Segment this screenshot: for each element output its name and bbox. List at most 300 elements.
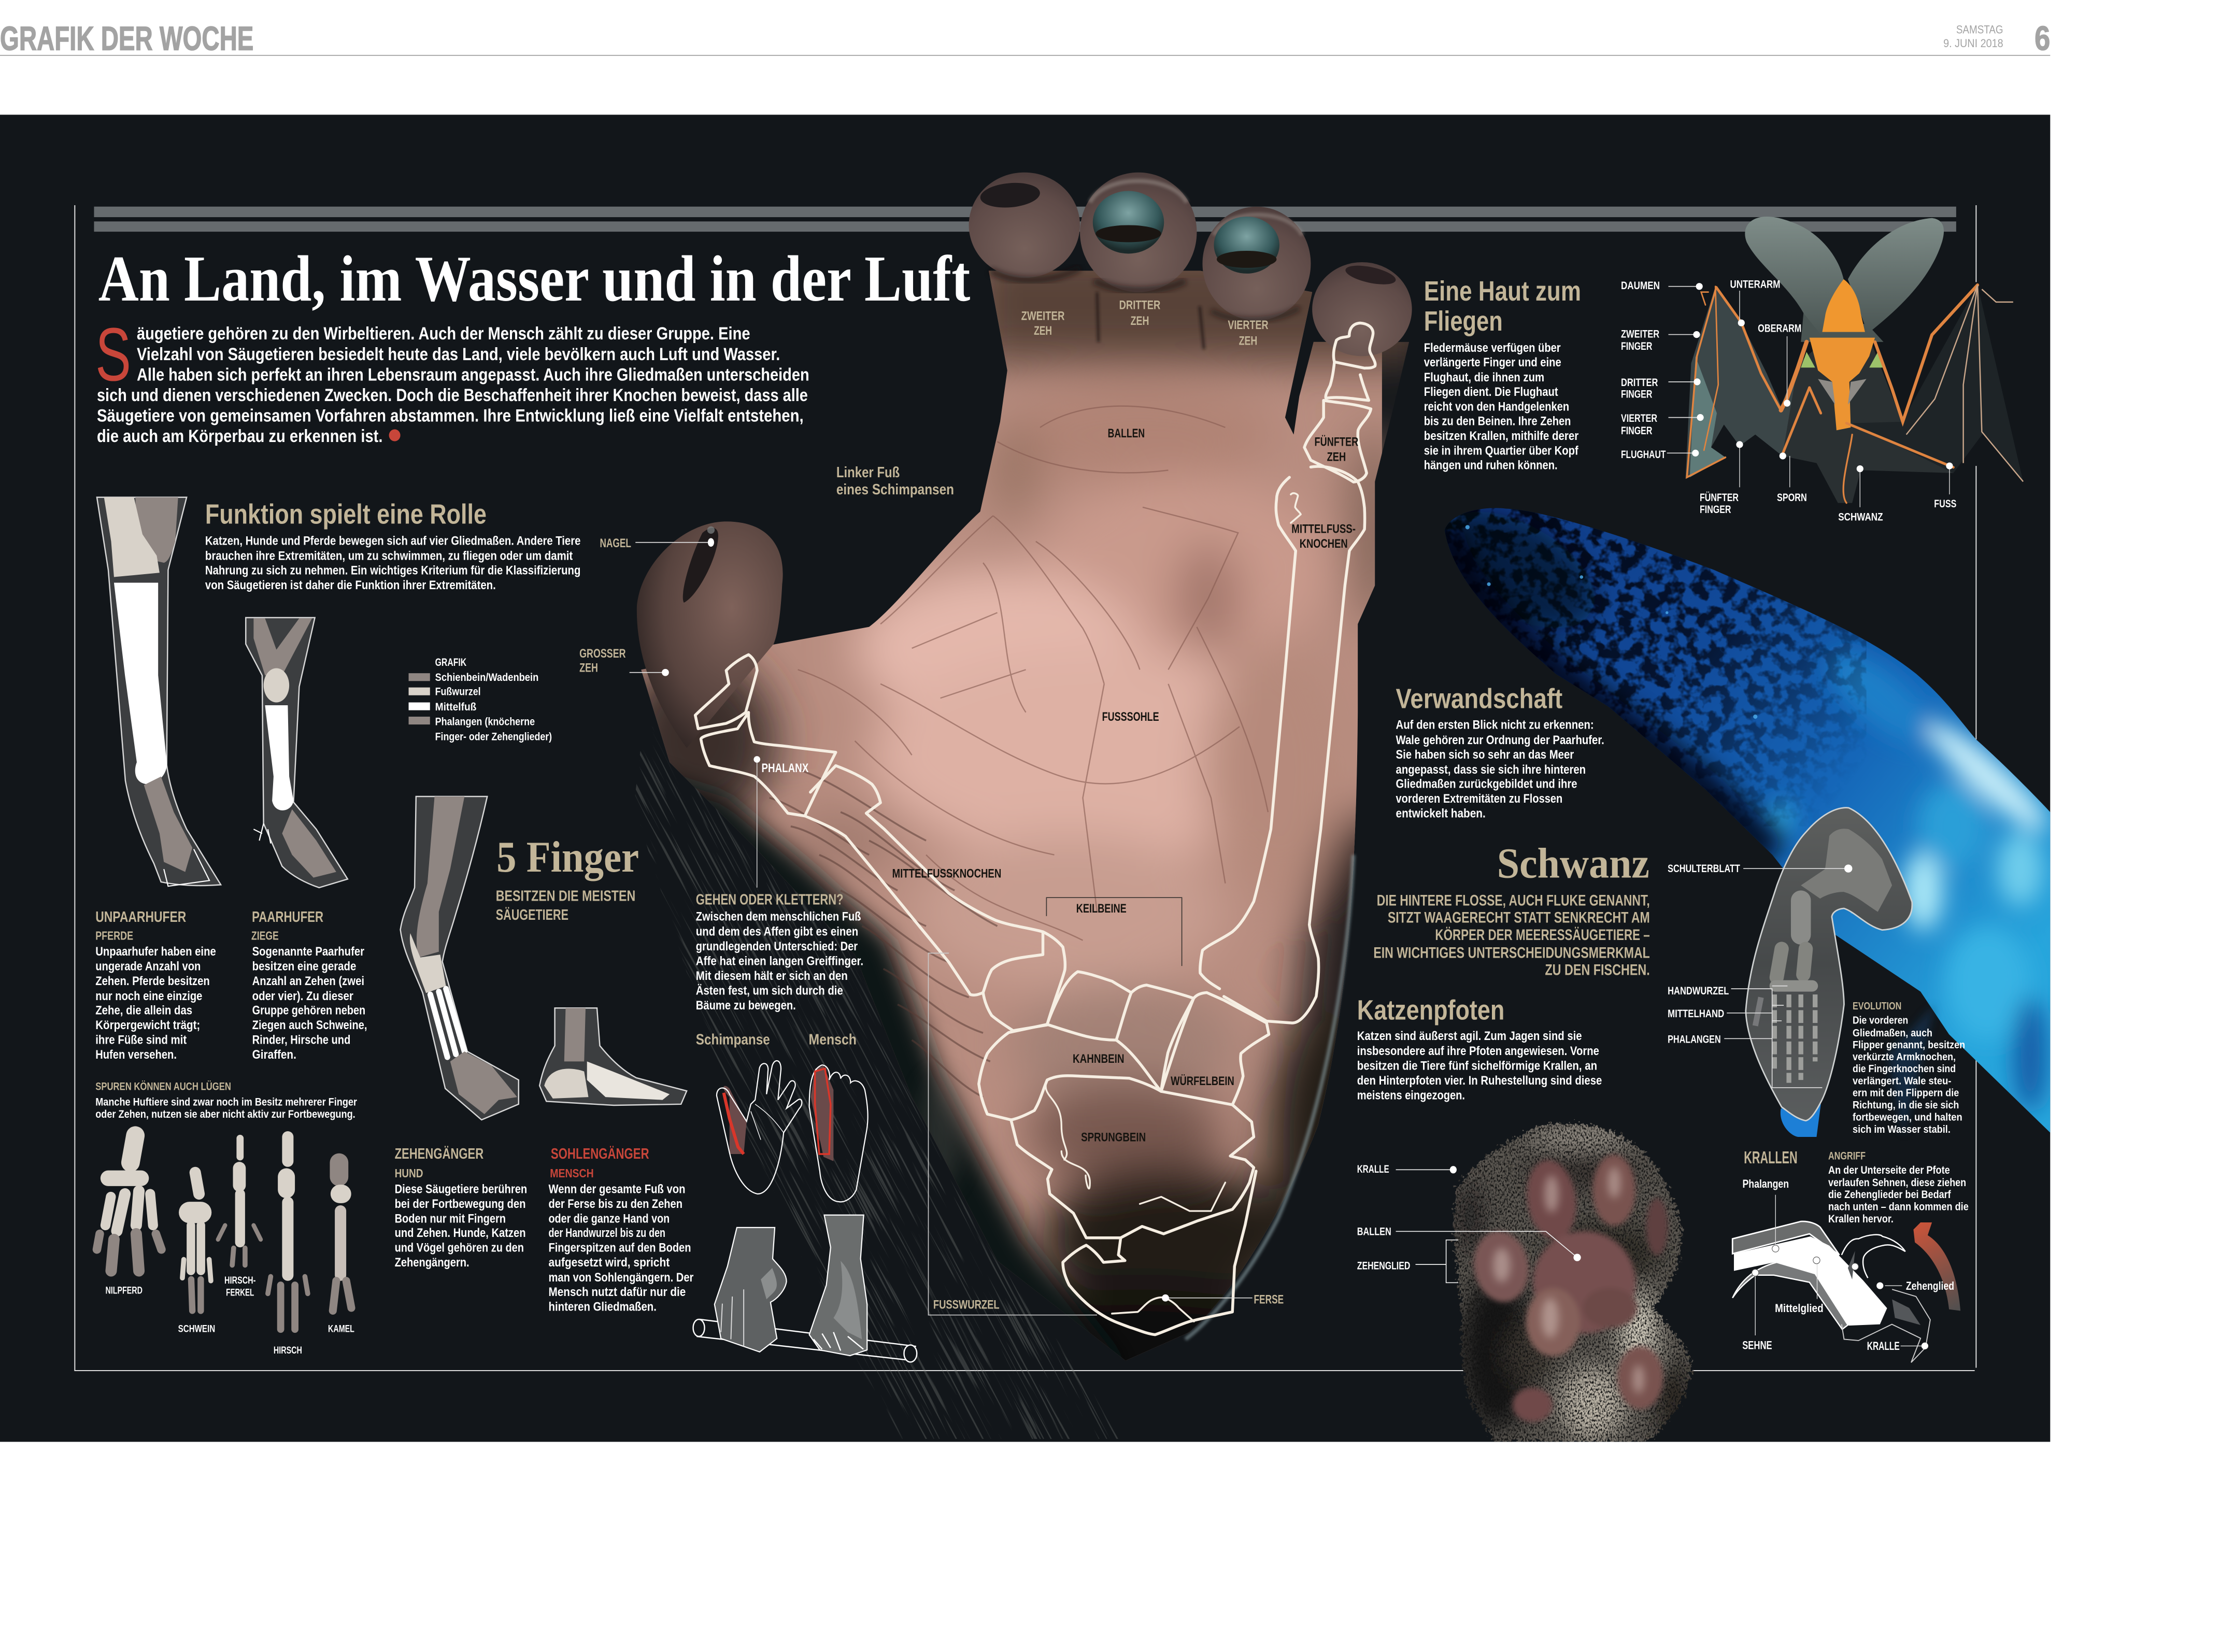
text: Paarhufer: Giraffen. <box>252 1048 296 1062</box>
label: Vierter Finger: FINGER <box>1621 425 1652 437</box>
paw labels <box>1357 1163 1581 1283</box>
body text <box>205 534 580 592</box>
label: Oberarm: OBERARM <box>1758 323 1801 335</box>
label: Sporn: SPORN <box>1777 492 1807 504</box>
text: Sohlengaenger: der Ferse bis zu den Zehen <box>549 1197 682 1211</box>
text: Krallen <box>1744 1148 1969 1225</box>
text: Evolution: ern mit den Flippern die <box>1853 1088 1959 1099</box>
bracket and label: Fusswurzel: FUSSWURZEL <box>933 1298 1000 1312</box>
text: Unpaarhufer: Körpergewicht trägt; <box>95 1018 200 1032</box>
text: Zehengaenger: ZEHENGÄNGER <box>395 1145 483 1162</box>
heading: Funktion spielt eine Rolle <box>205 499 487 530</box>
label: Phalangen: Phalangen <box>1742 1177 1789 1190</box>
text: Eine Haut zum Fliegen: bis zu den Beinen. Ihre Zehen <box>1424 415 1571 429</box>
text: Zehengaenger: Boden nur mit Fingern <box>395 1212 506 1226</box>
text: Unpaarhufer: Hufen versehen. <box>95 1048 177 1062</box>
intro text: äugetiere gehören zu den Wirbeltieren. Auch der Mensch zählt zu dieser Gruppe. Eine <box>137 324 750 344</box>
text: Unpaarhufer: ihre Füße sind mit <box>95 1033 187 1047</box>
bone outlines on the foot <box>695 323 1375 1335</box>
label: Schulterblatt: SCHULTERBLATT <box>1668 862 1740 875</box>
body text: von Säugetieren ist daher die Funktion ihrer Extremitäten. <box>205 578 496 592</box>
text: Katzenpfoten: Katzenpfoten <box>1357 995 1504 1026</box>
legend row: Mittelfuss: Mittelfuß <box>435 701 477 713</box>
red arrow <box>1913 1222 1960 1311</box>
heading: Schwanz: EIN WICHTIGES UNTERSCHEIDUNGSMERKMAL <box>1373 945 1650 962</box>
lower tendon band <box>1732 1262 1848 1329</box>
label: Phalanx: PHALANX <box>762 762 808 775</box>
text: Eine Haut zum Fliegen: hängen und ruhen können. <box>1424 459 1558 473</box>
label: Phalangen: PHALANGEN <box>1668 1033 1721 1046</box>
joint marker <box>1852 1263 1858 1270</box>
hand gripping a branch <box>693 1228 917 1362</box>
tarsal bones <box>979 972 1269 1335</box>
decorative header bars <box>94 207 1956 232</box>
text: Unpaarhufer: Zehe, die allein das <box>95 1003 192 1017</box>
intro text: die auch am Körperbau zu erkennen ist. <box>97 426 382 446</box>
black bone labels: KNOCHEN <box>1300 537 1348 551</box>
page number: 6 <box>2034 19 2050 57</box>
black bone labels: FÜNFTER <box>1315 435 1358 449</box>
text: Verwandschaft: Wale gehören zur Ordnung der Paarhufer. <box>1396 733 1604 747</box>
label: Handwurzel <box>1668 985 1822 1088</box>
text: Eine Haut zum Fliegen: Eine Haut zum <box>1424 276 1581 307</box>
big toe bones <box>695 654 1065 1024</box>
text: Zehengaenger: und Zehen. Hunde, Katzen <box>395 1226 526 1240</box>
dark head shading <box>1420 488 1614 652</box>
text: Evolution: verlängert. Wale steu- <box>1853 1076 1952 1087</box>
black bone labels: KEILBEINE <box>1076 902 1127 916</box>
heading: Schwanz: KÖRPER DER MEERESSÄUGETIERE – <box>1435 927 1650 944</box>
whale flipper skeleton <box>1746 808 1912 1137</box>
text: Evolution: Gliedmaßen, auch <box>1853 1028 1932 1039</box>
text: Katzenpfoten: meistens eingezogen. <box>1357 1089 1465 1103</box>
bat x-ray <box>1685 217 2023 503</box>
label: Handwurzel: HANDWURZEL <box>1668 985 1729 997</box>
text: Sohlengaenger: Wenn der gesamte Fuß von <box>549 1182 685 1196</box>
text: Krallen: ANGRIFF <box>1828 1149 1866 1162</box>
text: Spuren koennen auch luegen: SPUREN KÖNNEN AUCH LÜGEN <box>95 1080 231 1092</box>
heading: Schwanz: SITZT WAAGERECHT STATT SENKRECHT AM <box>1388 909 1650 927</box>
text: Eine Haut zum Fliegen: Fliegen dient. Die Flughaut <box>1424 386 1558 399</box>
cat paw photo <box>1439 1112 1702 1446</box>
black bone labels: ZEH <box>1327 450 1346 464</box>
toe labels: VIERTER <box>1228 319 1268 332</box>
claw diagram <box>1732 1221 1960 1362</box>
bracket and label: Fusswurzel <box>928 953 1097 1315</box>
text: Paarhufer: PAARHUFER <box>252 909 323 925</box>
foot labels <box>579 299 1358 1315</box>
skeleton: Hirschferkel <box>218 1138 261 1265</box>
text: Spuren koennen auch luegen: oder Zehen, nutzen sie aber nicht aktiv zur Fortbewegung. <box>95 1108 355 1120</box>
upper claw <box>1842 1235 1905 1278</box>
text: Unpaarhufer: UNPAARHUFER <box>95 909 186 925</box>
text: Gehen oder klettern: und dem des Affen gibt es einen <box>696 924 858 938</box>
black bone labels: MITTELFUSS- <box>1291 522 1356 536</box>
skeleton: Hirsch <box>268 1137 308 1329</box>
skeleton <box>1822 279 1865 332</box>
text: Evolution: Die vorderen <box>1853 1015 1908 1027</box>
lower claw <box>1842 1289 1930 1362</box>
label: Mittelhand: MITTELHAND <box>1668 1007 1724 1020</box>
text: Paarhufer: ZIEGE <box>251 929 279 943</box>
text: Eine Haut zum Fliegen: Fledermäuse verfügen über <box>1424 341 1561 355</box>
legend row: Phalangen: Finger- oder Zehenglieder) <box>435 731 552 743</box>
skeleton: Kamel <box>333 1163 351 1311</box>
text: Zehengaenger: bei der Fortbewegung den <box>395 1197 526 1211</box>
text: Unpaarhufer: nur noch eine einzige <box>95 989 202 1003</box>
wing membranes <box>1685 287 1831 479</box>
label: Unterarm: UNTERARM <box>1730 278 1780 290</box>
skeleton labels: FERKEL <box>226 1288 254 1299</box>
black bone labels: SPRUNGBEIN <box>1081 1131 1146 1144</box>
human foot on a branch <box>809 1215 867 1356</box>
text: Sohlengaenger: Mensch nutzt dafür nur die <box>549 1285 686 1299</box>
label: Mittelglied <box>1775 1257 1824 1315</box>
text: Katzenpfoten: insbesondere auf ihre Pfoten angewiesen. Vorne <box>1357 1044 1599 1058</box>
arm bones <box>1775 901 1812 986</box>
label: Dritter Finger <box>1621 377 1701 401</box>
text: Zehengaenger: Zehengängern. <box>395 1256 469 1270</box>
text: Sohlengaenger: oder die ganze Hand von <box>549 1212 670 1226</box>
mottled skin <box>1439 499 1867 827</box>
heading: 5 Finger: BESITZEN DIE MEISTEN <box>496 888 635 905</box>
label: Dritter Finger: FINGER <box>1621 389 1652 401</box>
date: SAMSTAG <box>1956 23 2003 36</box>
dark lower edge of the head <box>1445 530 1772 855</box>
label: Zweiter Finger: ZWEITER <box>1621 329 1659 340</box>
label: Zehenglied: Zehenglied <box>1906 1279 1954 1292</box>
text: Sohlengaenger: der Handwurzel bis zu den <box>549 1226 665 1240</box>
label: Vierter Finger <box>1621 412 1704 437</box>
bracket: Keilbeine <box>1046 898 1182 966</box>
text: Sohlengaenger: aufgesetzt wird, spricht <box>549 1256 670 1270</box>
text: Katzenpfoten: Katzen sind äußerst agil. Zum Jagen sind sie <box>1357 1029 1582 1043</box>
section title: GRAFIK DER WOCHE <box>0 20 253 57</box>
toe labels: DRITTER <box>1119 299 1160 312</box>
body text: Katzen, Hunde und Pferde bewegen sich auf vier Gliedmaßen. Andere Tiere <box>205 534 580 548</box>
text: Katzenpfoten: besitzen die Tiere fünf sichelförmige Krallen, an <box>1357 1059 1597 1073</box>
claw diagram labels <box>1742 1177 1954 1352</box>
black bone labels: BALLEN <box>1108 427 1145 440</box>
label: Sehne: SEHNE <box>1742 1339 1772 1352</box>
text: Gehen oder klettern: Zwischen dem menschlichen Fuß <box>696 910 861 924</box>
text: Paarhufer: oder vier). Zu dieser <box>252 989 353 1003</box>
text: Eine Haut zum Fliegen: Flughaut, die ihnen zum <box>1424 371 1544 384</box>
text: Unpaarhufer: PFERDE <box>95 929 133 943</box>
label: Ferse: FERSE <box>1254 1293 1284 1307</box>
text: Evolution: fortbewegen, und halten <box>1853 1112 1962 1123</box>
label: Zweiter Finger: FINGER <box>1621 340 1652 352</box>
label: Grosser Zeh: ZEH <box>579 661 598 675</box>
text: Verwandschaft: Sie haben sich so sehr an das Meer <box>1396 748 1574 762</box>
section: Funktion spielt eine Rolle <box>205 499 580 592</box>
ungulate foot skeletons <box>97 1135 351 1329</box>
text: Krallen: KRALLEN <box>1744 1148 1798 1167</box>
caption: left foot of a chimpanzee <box>836 464 954 498</box>
whale shading <box>1768 637 2057 1112</box>
dark lower left edge fading into hair <box>677 770 1121 1358</box>
label: Sporn <box>1777 452 1807 504</box>
heading: 5 Finger: SÄUGETIERE <box>496 906 568 923</box>
text: Sohlengaenger: SOHLENGÄNGER <box>551 1145 649 1162</box>
label: Flughaut: FLUGHAUT <box>1621 449 1666 461</box>
text: Gehen oder klettern: grundlegenden Unterschied: Der <box>696 939 858 953</box>
upper tendon band <box>1732 1221 1839 1255</box>
heading: 5 Finger <box>496 833 639 923</box>
label: Fuenfter Finger: FÜNFTER <box>1700 492 1739 504</box>
label: Phalangen <box>1742 1177 1789 1252</box>
label: Sehne <box>1742 1269 1772 1352</box>
heading: Schwanz: Schwanz <box>1497 840 1649 887</box>
text: Krallen: verlaufen Sehnen, diese ziehen <box>1828 1176 1966 1189</box>
text: Paarhufer: Gruppe gehören neben <box>252 1003 365 1017</box>
caption: left foot of a chimpanzee: eines Schimpansen <box>836 481 954 498</box>
pad highlights <box>1493 1167 1644 1393</box>
text: Katzenpfoten <box>1357 995 1602 1103</box>
intro text: Vielzahl von Säugetieren besiedelt heute das Land, viele bevölkern auch Luft und Wasser. <box>137 345 780 364</box>
faint fin shadow <box>1888 1004 1935 1135</box>
skeleton labels: SCHWEIN <box>178 1324 215 1335</box>
neck membrane <box>1801 310 1884 342</box>
text: Eine Haut zum Fliegen: Fliegen <box>1424 306 1503 337</box>
text: Evolution: die Fingerknochen sind <box>1853 1063 1956 1075</box>
text: Evolution: sich im Wasser stabil. <box>1853 1124 1951 1135</box>
fifth toe bones <box>1200 323 1375 1023</box>
text: Eine Haut zum Fliegen: reicht von den Handgelenken <box>1424 401 1569 414</box>
heading: 5 Finger: 5 Finger <box>496 833 639 881</box>
toe labels: ZEH <box>1034 324 1052 338</box>
wrinkled fold lines <box>770 770 998 1097</box>
text: Unpaarhufer: ungerade Anzahl von <box>95 959 201 973</box>
dark panel <box>0 115 2050 1442</box>
legend row: Schienbein: Schienbein/Wadenbein <box>435 672 538 683</box>
label: Ferse <box>1162 1293 1284 1307</box>
text: Eine Haut zum Fliegen: sie in ihrem Quartier über Kopf <box>1424 445 1578 458</box>
text: Verwandschaft: entwickelt haben. <box>1396 807 1486 821</box>
foot edge highlight <box>1185 855 1354 1339</box>
label: Ballen: BALLEN <box>1357 1226 1391 1238</box>
label: Mittelglied: Mittelglied <box>1775 1302 1824 1315</box>
skeleton labels: HIRSCH- <box>224 1275 256 1286</box>
text: Paarhufer <box>251 909 367 1062</box>
text: Verwandschaft <box>1396 683 1604 821</box>
intro text: sich und dienen verschiedenen Zwecken. Doch die Beschaffenheit ihrer Knochen beweist, dass alle <box>97 386 808 405</box>
skeleton labels: KAMEL <box>328 1324 354 1335</box>
label: Grosser Zeh: GROSSER <box>579 647 626 661</box>
text: Zehengaenger: HUND <box>395 1166 423 1180</box>
text: Eine Haut zum Fliegen: verlängerte Finger und eine <box>1424 356 1561 369</box>
fifth toe <box>1312 262 1412 356</box>
text: Sohlengaenger: man von Sohlengängern. Der <box>549 1271 694 1285</box>
text: Unpaarhufer <box>95 909 216 1062</box>
black bone labels: KAHNBEIN <box>1073 1052 1125 1066</box>
text: Krallen: Krallen hervor. <box>1828 1212 1894 1225</box>
text: Paarhufer: Sogenannte Paarhufer <box>252 945 364 959</box>
text: Krallen: An der Unterseite der Pfote <box>1828 1163 1950 1176</box>
legend row: Phalangen: Phalangen (knöcherne <box>435 716 535 728</box>
label: Kralle <box>1357 1163 1457 1175</box>
date: 9. JUNI 2018 <box>1943 37 2003 50</box>
legend row: Fusswurzel: Fußwurzel <box>435 686 481 698</box>
text: Paarhufer: Ziegen auch Schweine, <box>252 1018 367 1032</box>
text: Spuren koennen auch luegen <box>95 1080 357 1120</box>
text: Evolution: EVOLUTION <box>1853 1001 1901 1012</box>
drop cap: S <box>95 312 131 396</box>
text: Eine Haut zum Fliegen: besitzen Krallen, mithilfe derer <box>1424 430 1578 443</box>
third toe <box>1080 173 1197 292</box>
text: Zehengaenger: Diese Säugetiere berühren <box>395 1182 527 1196</box>
text: Evolution: verkürzte Armknochen, <box>1853 1051 1956 1063</box>
toe labels: ZEH <box>1239 334 1257 348</box>
text: Evolution: Flipper genannt, besitzen <box>1853 1039 1965 1051</box>
ribs <box>1818 379 1867 405</box>
text: Evolution: Richtung, in die sie sich <box>1853 1100 1959 1111</box>
fourth toe <box>1202 207 1311 321</box>
label: Grosser Zeh <box>579 647 626 675</box>
legend row: Phalangen <box>409 716 552 743</box>
text: Sohlengaenger: MENSCH <box>550 1166 594 1180</box>
toe labels <box>1021 299 1268 348</box>
text: Unpaarhufer: Zehen. Pferde besitzen <box>95 974 210 988</box>
black bone labels: FUSSSOHLE <box>1102 710 1159 724</box>
big toe <box>637 521 783 748</box>
text: Verwandschaft: vorderen Extremitäten zu Flossen <box>1396 792 1562 806</box>
sole of the foot <box>641 270 1409 1361</box>
text: Verwandschaft: Auf den ersten Blick nicht zu erkennen: <box>1396 718 1594 732</box>
black bone labels: MITTELFUSSKNOCHEN <box>892 867 1001 881</box>
page header <box>0 19 2050 57</box>
dog leg illustration <box>401 796 519 1120</box>
legend: GRAFIK <box>435 657 466 668</box>
body text: brauchen ihre Extremitäten, um zu schwimmen, zu fliegen oder um damit <box>205 549 573 563</box>
separators between toes <box>1097 292 1204 349</box>
label: Ballen <box>1357 1226 1581 1261</box>
label: Kralle: KRALLE <box>1357 1163 1389 1175</box>
label: Fuss: FUSS <box>1934 498 1956 510</box>
dark hair around the foot <box>635 727 1118 1439</box>
label: Fuenfter Finger <box>1700 441 1743 516</box>
legend <box>409 657 552 743</box>
legend row: Fusswurzel <box>409 686 481 698</box>
intro text: Säugetiere von gemeinsamen Vorfahren abstammen. Ihre Entwicklung ließ eine Vielfalt entstehen, <box>97 406 804 426</box>
heading: Schwanz: DIE HINTERE FLOSSE, AUCH FLUKE GENANNT, <box>1377 892 1650 909</box>
human foot outline <box>809 1065 868 1202</box>
text: Verwandschaft: angepasst, dass sie sich ihre hinteren <box>1396 763 1586 777</box>
skeleton: Schwein <box>182 1173 211 1311</box>
skeleton labels: HIRSCH <box>274 1345 302 1356</box>
heading: Schwanz: ZU DEN FISCHEN. <box>1545 962 1650 979</box>
text: Unpaarhufer: Unpaarhufer haben eine <box>95 945 216 959</box>
caption: left foot of a chimpanzee: Linker Fuß <box>836 464 900 481</box>
black bone labels <box>892 427 1358 1144</box>
paw pads <box>1469 1155 1668 1422</box>
label: Fuss <box>1934 463 1956 510</box>
end mark <box>389 429 401 442</box>
skeleton: Nilpferd <box>97 1135 162 1271</box>
text: Paarhufer: Rinder, Hirsche und <box>252 1033 350 1047</box>
chimpanzee foot outline <box>717 1061 802 1194</box>
label: Fuenfter Finger: FINGER <box>1700 504 1731 516</box>
text: Gehen oder klettern: Affe hat einen langen Greiffinger. <box>696 954 863 968</box>
text: Gehen oder klettern: GEHEN ODER KLETTERN? <box>696 891 844 908</box>
second toe <box>969 173 1080 280</box>
label: Schwanz: SCHWANZ <box>1838 511 1883 523</box>
label: Kralle: KRALLE <box>1867 1340 1900 1352</box>
text: Sohlengaenger: Fingerspitzen auf den Boden <box>549 1241 691 1255</box>
main photo: chimpanzee foot <box>636 172 1412 1361</box>
label: Schulterblatt <box>1668 862 1852 875</box>
text: Sohlengaenger: hinteren Gliedmaßen. <box>549 1300 657 1314</box>
text: Gehen oder klettern: Mensch <box>809 1031 857 1048</box>
label: Oberarm <box>1758 323 1801 407</box>
text: Krallen: nach unten – dann kommen die <box>1828 1200 1969 1213</box>
whale skin spots <box>1465 525 1854 914</box>
label: Zehenglied <box>1357 1240 1458 1283</box>
label: Daumen <box>1621 280 1703 292</box>
skeleton labels: NILPFERD <box>105 1285 143 1296</box>
legend row: Mittelfuss <box>409 701 477 713</box>
text: Eine Haut zum Fliegen <box>1424 276 1581 473</box>
text: Paarhufer: Anzahl an Zehen (zwei <box>252 974 364 988</box>
whale photo <box>1420 488 2057 1140</box>
label: Zehenglied: ZEHENGLIED <box>1357 1260 1410 1272</box>
text: Gehen oder klettern: Ästen fest, um sich durch die <box>696 984 843 998</box>
frame lines <box>75 205 1976 1371</box>
toe labels: ZWEITER <box>1021 309 1064 323</box>
label: Zehenglied <box>1876 1279 1954 1292</box>
date <box>1943 23 2003 50</box>
blue flipper tip <box>1781 1104 1821 1137</box>
label: Unterarm <box>1730 278 1780 326</box>
phalanx bones <box>1734 1236 1887 1326</box>
ears <box>1745 217 1844 336</box>
finger bones <box>1755 994 1815 1083</box>
text: Gehen oder klettern: Bäume zu bewegen. <box>696 999 796 1013</box>
human foot illustration <box>539 1008 687 1105</box>
intro text <box>95 312 809 446</box>
label: Zweiter Finger <box>1621 329 1700 352</box>
body text: Nahrung zu sich zu nehmen. Ein wichtiges Kriterium für die Klassifizierung <box>205 564 580 578</box>
text: Verwandschaft: Verwandschaft <box>1396 683 1562 714</box>
bat labels <box>1621 278 1956 523</box>
black bone labels: WÜRFELBEIN <box>1171 1074 1234 1088</box>
toe labels: ZEH <box>1131 315 1149 328</box>
text: Zehengaenger: und Vögel gehören zu den <box>395 1241 524 1255</box>
horse leg illustration <box>97 497 221 886</box>
heading: Schwanz <box>1373 840 1650 979</box>
text: Gehen oder klettern: Mit diesem hält er sich an den <box>696 969 848 983</box>
label: Daumen: DAUMEN <box>1621 280 1660 292</box>
skeleton labels <box>105 1275 354 1356</box>
flipper labels <box>1668 862 1852 1088</box>
text: Sohlengaenger <box>549 1145 694 1314</box>
sole wrinkles <box>798 406 1268 941</box>
text: Gehen oder klettern: Schimpanse <box>696 1031 770 1048</box>
text: Paarhufer: besitzen eine gerade <box>252 959 356 973</box>
title: An Land, im Wasser und in der Luft <box>98 243 970 315</box>
text: Verwandschaft: Gliedmaßen zurückgebildet und ihre <box>1396 777 1577 791</box>
text: Spuren koennen auch luegen: Manche Huftiere sind zwar noch im Besitz mehrerer Finger <box>95 1096 357 1108</box>
intro text: Alle haben sich perfekt an ihren Lebensraum angepasst. Auch ihre Gliedmaßen unterscheiden <box>137 365 809 384</box>
scapula <box>1801 829 1892 912</box>
text: Krallen: die Zehenglieder bei Bedarf <box>1828 1188 1951 1201</box>
label: Phalanx <box>753 756 808 888</box>
label: Dritter Finger: DRITTER <box>1621 377 1658 389</box>
label: Nagel: NAGEL <box>600 537 631 550</box>
text: Evolution <box>1853 1001 1965 1135</box>
goat leg illustration <box>246 618 348 888</box>
label: Schwanz <box>1838 465 1883 523</box>
